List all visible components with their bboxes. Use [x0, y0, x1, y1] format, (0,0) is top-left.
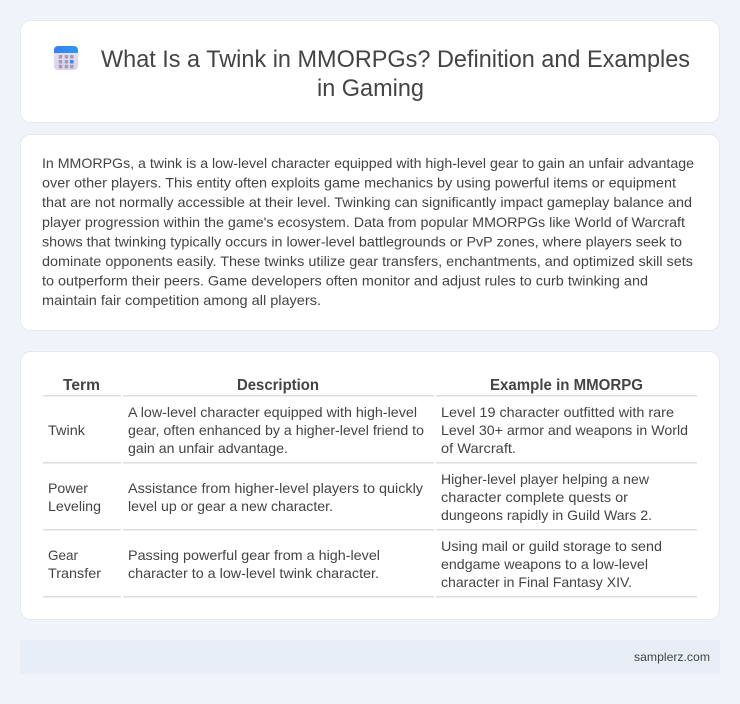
- table row: Twink: gain an unfair advantage.: [128, 440, 288, 456]
- panel: definition text: [20, 134, 720, 330]
- footer bar: samplerz.com: [634, 650, 710, 664]
- table row: Twink: Level 30+ armor and weapons in World: [441, 422, 688, 438]
- text block: definition paragraph: player progression within the game's ecosystem. Data from popular MMORPGs like World of Warcraft: [42, 214, 685, 230]
- title: in Gaming: [317, 75, 424, 102]
- footer bar: [20, 640, 720, 674]
- text block: definition paragraph: shows that twinking typically occurs in lower-level battlegrounds or PvP zones, where players seek to: [42, 233, 682, 249]
- title: [101, 46, 690, 102]
- text block: definition paragraph: to outperform their peers. Game developers often monitor and adjust rules to curb twinking and: [42, 273, 648, 289]
- table row: Gear Transfer: character in Final Fantasy XIV.: [441, 574, 632, 590]
- panel: title card: [20, 20, 720, 122]
- table row: Power Leveling: Higher-level player helping a new: [441, 471, 650, 487]
- text block: definition paragraph: dominate opponents easily. These twinks utilize gear transfers, enchantments, and optimized skill sets: [42, 253, 693, 269]
- title: What Is a Twink in MMORPGs? Definition and Examples: [101, 46, 690, 73]
- icon: calendar: [54, 46, 78, 70]
- text block: definition paragraph: that are not normally accessible at their level. Twinking can significantly impact gameplay balance and: [42, 194, 692, 210]
- table row: Power Leveling: Power: [48, 480, 88, 496]
- table row: Gear Transfer: Using mail or guild storage to send: [441, 538, 662, 554]
- table row: Twink: [43, 404, 697, 464]
- table row: Twink: gear, often enhanced by a higher-level friend to: [128, 422, 424, 438]
- table row: Twink: of Warcraft.: [441, 440, 516, 456]
- table row: Twink: Twink: [48, 422, 86, 438]
- text block: definition paragraph: maintain fair competition among all players.: [42, 292, 321, 308]
- panel: terms table: [20, 352, 720, 620]
- table row: Power Leveling: [43, 471, 697, 530]
- table row: Power Leveling: character complete quests or: [441, 489, 628, 505]
- table row: Twink: Level 19 character outfitted with rare: [441, 404, 674, 420]
- table header row: [43, 377, 697, 396]
- table row: Twink: A low-level character equipped with high-level: [128, 404, 417, 420]
- table row: Gear Transfer: endgame weapons to a low-level: [441, 556, 648, 572]
- table row: Gear Transfer: character to a low-level twink character.: [128, 565, 379, 581]
- table row: Gear Transfer: Transfer: [48, 565, 101, 581]
- table header row: Term: [63, 377, 100, 394]
- text block: definition paragraph: In MMORPGs, a twink is a low-level character equipped with high-level gear to gain an unfair advantage: [42, 155, 694, 171]
- table header row: Description: [237, 377, 319, 394]
- table row: Gear Transfer: Gear: [48, 547, 78, 563]
- table row: Power Leveling: level up or gear a new character.: [128, 498, 333, 514]
- table row: Gear Transfer: [43, 538, 697, 598]
- table row: Gear Transfer: Passing powerful gear from a high-level: [128, 547, 380, 563]
- text block: definition paragraph: [42, 155, 694, 308]
- table header row: Example in MMORPG: [490, 377, 643, 394]
- text block: definition paragraph: over other players. This entity often exploits game mechanics by using powerful items or equipment: [42, 175, 676, 191]
- table row: Power Leveling: dungeons rapidly in Guild Wars 2.: [441, 507, 652, 523]
- table row: Power Leveling: Leveling: [48, 498, 101, 514]
- table row: Power Leveling: Assistance from higher-level players to quickly: [128, 480, 423, 496]
